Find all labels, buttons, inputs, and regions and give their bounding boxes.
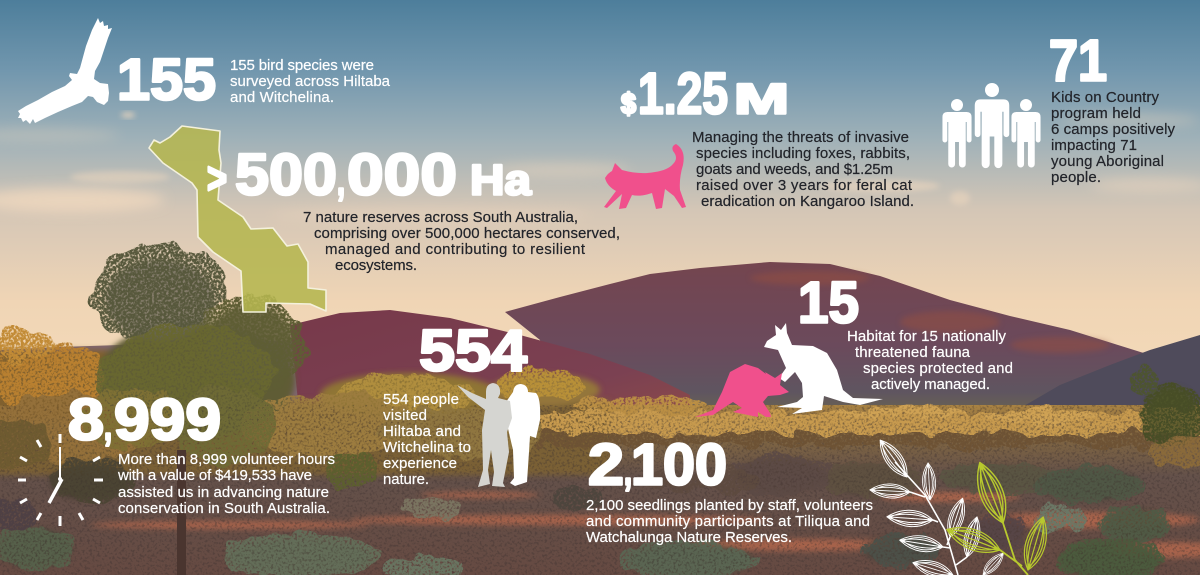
sky — [0, 0, 1200, 420]
stat: $1.25M: M — [734, 76, 789, 124]
text: visitors: Witchelina to — [383, 439, 471, 456]
icon: clock — [18, 434, 103, 526]
text: visitors: experience — [383, 455, 457, 472]
low shrubs — [0, 436, 1200, 575]
main mountain — [505, 262, 1147, 420]
red dirt — [90, 492, 1200, 558]
icon: green leaf sprig — [943, 458, 1053, 575]
text: invasive species: raised over 3 years for feral cat — [696, 177, 913, 194]
text: kids on country: 6 camps positively — [1051, 121, 1176, 138]
text: nature reserves: ecosystems. — [335, 257, 417, 274]
stat: >500,000 Ha: 500 — [235, 142, 337, 208]
icon: two hikers — [457, 383, 540, 487]
stat: 2,100 — [588, 432, 727, 498]
text: nature reserves: managed and contributing to resilient — [325, 241, 586, 258]
stat: >500,000 Ha — [207, 142, 532, 208]
text: seedlings: Watchalunga Nature Reserves. — [586, 529, 792, 546]
text: invasive species: Managing the threats of invasive — [692, 129, 909, 146]
stat: 8,999: 999 — [114, 388, 221, 452]
text: bird species surveyed: surveyed across Hiltaba — [230, 73, 391, 90]
icon: pink kangaroo — [695, 364, 789, 417]
text: threatened fauna: threatened fauna — [855, 344, 971, 361]
stat: >500,000 Ha: , — [337, 160, 345, 204]
text: kids on country: Kids on Country — [1051, 89, 1160, 106]
text: kids on country: program held — [1051, 105, 1141, 122]
text: nature reserves: 7 nature reserves across South Australia, — [303, 209, 578, 226]
icon: wedge-tailed eagle in flight — [18, 18, 112, 124]
text: invasive species: goats and weeds, and $1.25m — [696, 161, 893, 178]
text: invasive species: eradication on Kangaroo Island. — [701, 193, 914, 210]
far low ridge — [0, 340, 420, 420]
stat: 71: 71 — [1049, 28, 1107, 94]
text: bird species surveyed: 155 bird species were — [230, 57, 374, 74]
ground — [0, 405, 1200, 575]
stat: 2,100: , — [624, 450, 632, 494]
text: threatened fauna: Habitat for 15 nationally — [847, 328, 1006, 345]
text: volunteer hours: More than 8,999 volunteer hours — [118, 451, 335, 468]
text: nature reserves: comprising over 500,000 hectares conserved, — [314, 225, 620, 242]
hiker with backpack — [506, 384, 540, 486]
stat: $1.25M — [621, 62, 789, 126]
stat: 2,100: 2 — [588, 432, 624, 498]
text: volunteer hours: assisted us in advancing nature — [118, 484, 329, 501]
icon: white leaf sprig — [869, 435, 1007, 575]
text: bird species surveyed: and Witchelina. — [230, 89, 334, 106]
text: kids on country: young Aboriginal — [1051, 153, 1164, 170]
left red hill — [290, 310, 690, 420]
stat: $1.25M: $ — [621, 88, 636, 120]
text: threatened fauna: actively managed. — [871, 376, 990, 393]
golden shrub band — [540, 396, 1200, 434]
text: visitors: 554 people — [383, 391, 459, 408]
left golden trees — [0, 329, 155, 471]
stat: 8,999: , — [104, 404, 112, 448]
text: invasive species: species including foxes, rabbits, — [696, 145, 910, 162]
right tree — [1131, 366, 1200, 447]
icon: feral cat — [604, 144, 686, 209]
main tree canopy — [80, 245, 305, 463]
sunlit ridges — [750, 271, 1110, 353]
shrub shadows — [0, 459, 1167, 575]
stat: >500,000 Ha: 000 — [347, 142, 457, 208]
icon: three young people — [942, 83, 1041, 168]
text: visitors: visited — [383, 407, 427, 424]
text: volunteer hours: conservation in South Australia. — [118, 500, 330, 517]
text: kids on country: impacting 71 — [1051, 137, 1137, 154]
trunk — [177, 450, 186, 575]
stat: >500,000 Ha: > — [207, 154, 227, 203]
text: threatened fauna: species protected and — [863, 360, 1013, 377]
icon: white kangaroo — [764, 323, 883, 414]
stat: $1.25M: 1.25 — [638, 62, 728, 126]
icon: map of nature reserves — [149, 126, 326, 312]
stat: 8,999 — [68, 388, 221, 452]
stat: 15: 15 — [798, 270, 859, 336]
hiker pointing — [457, 383, 512, 487]
stat: 8,999: 8 — [68, 388, 104, 452]
clouds — [0, 112, 1200, 223]
text: seedlings: 2,100 seedlings planted by staff, volunteers — [586, 497, 873, 514]
stat: 2,100: 100 — [631, 432, 727, 498]
stat: 155: 155 — [117, 48, 216, 112]
ground speckle — [0, 405, 1200, 575]
text: volunteer hours: with a value of $419,533 have — [117, 467, 312, 484]
text: kids on country: people. — [1051, 169, 1101, 186]
text: seedlings: and community participants at Tiliqua and — [586, 513, 870, 530]
stat: 554: 554 — [419, 318, 527, 384]
stat: >500,000 Ha: Ha — [470, 156, 532, 204]
text: visitors: nature. — [383, 471, 429, 488]
text: visitors: Hiltaba and — [383, 423, 461, 440]
solid vegetation mass behind foliage — [0, 260, 1198, 475]
right hill — [1000, 335, 1200, 420]
